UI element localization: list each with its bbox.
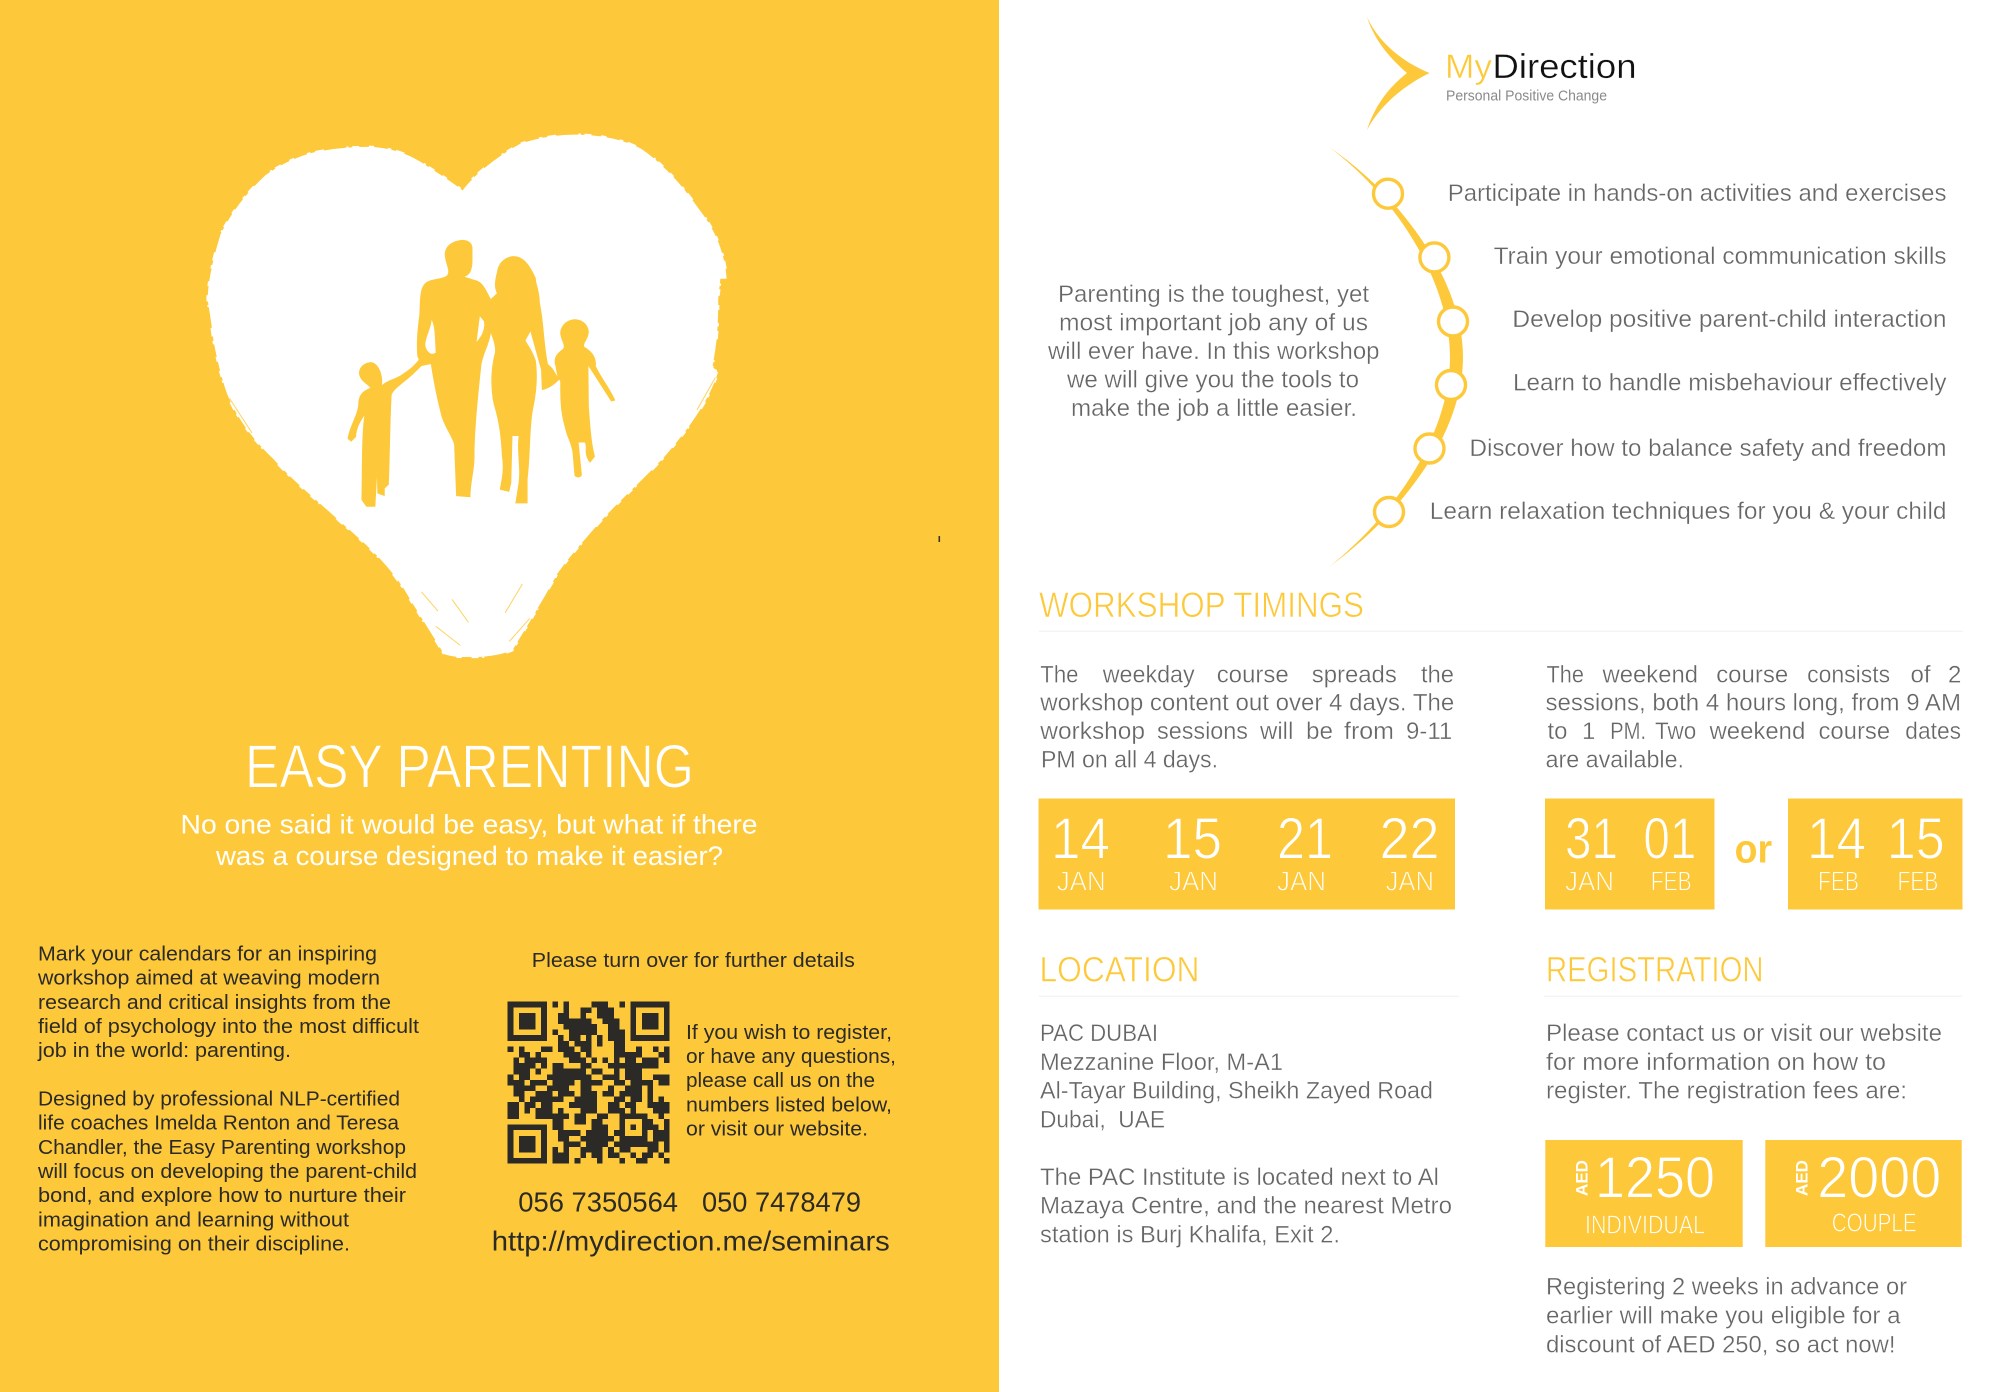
text: weekend course: The <box>1546 661 1584 688</box>
text block: workshop description: job in the world: parenting. <box>37 1040 291 1062</box>
text: early registration discount <box>1546 1273 1907 1358</box>
text block: workshop description: field of psychology into the most difficult <box>38 1016 419 1038</box>
text: location details <box>1040 1020 1452 1248</box>
text block: workshop description: bond, and explore how to nurture their <box>38 1185 406 1207</box>
fee box: couple: 2000 <box>1817 1146 1941 1211</box>
text: weekend course: weekend <box>1602 661 1698 688</box>
text: early registration discount: earlier will make you eligible for a <box>1546 1302 1901 1329</box>
icon: brush heart with family silhouette <box>206 133 728 658</box>
logo: MyDirection <box>1367 17 1636 130</box>
text: weekend course: Two <box>1655 718 1696 745</box>
list: workshop benefits: Learn relaxation techniques for you & your child <box>1430 498 1946 525</box>
date box: weekday dates: JAN <box>1386 866 1434 897</box>
fee box: couple <box>1765 1140 1962 1247</box>
text: weekday course: PM on all 4 days. <box>1041 746 1218 773</box>
text block: workshop description <box>37 944 419 1256</box>
text: location details: Al-Tayar Building, Sheikh Zayed Road <box>1040 1078 1433 1105</box>
text block: workshop description: Chandler, the Easy Parenting workshop <box>38 1137 406 1159</box>
text: weekday course: be <box>1306 718 1333 745</box>
heading: registration: REGISTRATION <box>1546 951 1764 990</box>
text: phone numbers: 056 7350564 <box>518 1186 678 1218</box>
subtitle: No one said it would be easy, but what if there <box>180 810 758 840</box>
text: weekend course: sessions, both 4 hours long, from 9 AM <box>1546 690 1961 717</box>
text: weekend course: are available. <box>1546 746 1684 773</box>
list: workshop benefits <box>1430 180 1947 525</box>
date box: weekday dates: JAN <box>1057 866 1106 897</box>
text: weekday course: The <box>1040 661 1078 688</box>
date box: weekend option one: JAN <box>1565 866 1614 897</box>
text block: workshop description: compromising on their discipline. <box>38 1234 350 1256</box>
text: contact note: please call us on the <box>686 1070 875 1092</box>
text: contact note: numbers listed below, <box>686 1094 892 1116</box>
text: location details: The PAC Institute is located next to Al <box>1040 1164 1439 1191</box>
text: weekend course: course <box>1716 661 1788 688</box>
list: workshop benefits: Develop positive parent-child interaction <box>1512 306 1946 333</box>
text: weekday course: workshop <box>1039 718 1145 745</box>
date box: weekday dates <box>1038 798 1455 910</box>
logo: MyDirection: My <box>1445 48 1492 86</box>
text: weekend course: PM. <box>1610 718 1646 745</box>
text: weekend course: to <box>1548 718 1568 745</box>
date box: weekend option two <box>1788 798 1962 910</box>
text block: workshop description: life coaches Imelda Renton and Teresa <box>38 1113 400 1135</box>
text: location details: PAC DUBAI <box>1040 1020 1158 1047</box>
text: intro paragraph: will ever have. In this workshop <box>1047 338 1380 365</box>
arc timeline with circles <box>1329 147 1468 567</box>
text: weekday course: will <box>1259 718 1293 745</box>
list: workshop benefits: Learn to handle misbehaviour effectively <box>1513 370 1947 396</box>
date box: weekend option one: 31 <box>1565 806 1618 871</box>
text: location details: Dubai, UAE <box>1040 1106 1165 1133</box>
text: early registration discount: Registering 2 weeks in advance or <box>1546 1273 1907 1300</box>
text: phone numbers <box>518 1186 861 1218</box>
subtitle <box>180 810 758 871</box>
text: registration intro: for more information on how to <box>1546 1049 1886 1076</box>
panel: yellow left page <box>0 0 999 1392</box>
text: location details: station is Burj Khalifa, Exit 2. <box>1040 1221 1340 1248</box>
fee box: individual <box>1545 1140 1743 1247</box>
text: registration intro <box>1546 1020 1942 1105</box>
text: phone numbers: 050 7478479 <box>702 1186 861 1218</box>
title: EASY PARENTING <box>245 732 694 800</box>
list: workshop benefits: Train your emotional communication skills <box>1494 243 1946 270</box>
text: weekday course: spreads <box>1312 661 1397 688</box>
text: weekend course: 1 <box>1582 718 1595 745</box>
text: weekday course: from <box>1344 718 1394 745</box>
text: weekend course: dates <box>1905 718 1961 745</box>
text: weekend course: weekend <box>1709 718 1805 745</box>
date box: weekend option two: FEB <box>1898 866 1938 897</box>
fee box: individual: AED <box>1572 1160 1591 1196</box>
text: weekend course: 2 <box>1948 661 1961 688</box>
text: contact note: or have any questions, <box>686 1046 896 1068</box>
logo: MyDirection: Direction <box>1492 48 1636 86</box>
date box: weekend option two: 14 <box>1807 806 1866 871</box>
text block: workshop description: imagination and learning without <box>38 1209 349 1231</box>
boy silhouette <box>348 353 432 507</box>
date box: weekday dates: JAN <box>1169 866 1218 897</box>
date box: weekday dates: 22 <box>1380 806 1440 871</box>
text: weekend course: consists <box>1807 661 1890 688</box>
subtitle: was a course designed to make it easier? <box>215 841 723 871</box>
text: intro paragraph: most important job any of us <box>1059 310 1368 336</box>
woman silhouette <box>488 256 559 503</box>
fee box: couple: AED <box>1792 1160 1811 1196</box>
list: workshop benefits: Discover how to balance safety and freedom <box>1470 435 1946 462</box>
text: early registration discount: discount of AED 250, so act now! <box>1546 1331 1896 1358</box>
icon: QR code <box>508 1002 670 1164</box>
list: workshop benefits: Participate in hands-on activities and exercises <box>1448 180 1946 207</box>
text: location details: Mezzanine Floor, M-A1 <box>1040 1049 1283 1076</box>
text: weekday course: weekday <box>1102 661 1195 688</box>
text: registration intro: register. The registration fees are: <box>1546 1078 1907 1105</box>
text block: workshop description: Designed by professional NLP-certified <box>38 1088 400 1110</box>
date box: weekend option one: 01 <box>1643 806 1696 871</box>
text: weekend course: course <box>1818 718 1890 745</box>
text: weekend course: of <box>1910 661 1931 688</box>
logo: MyDirection: Personal Positive Change <box>1446 89 1607 105</box>
heading: location: LOCATION <box>1040 951 1200 990</box>
date box: weekday dates: JAN <box>1277 866 1326 897</box>
text: weekday course: workshop content out over 4 days. The <box>1039 690 1454 717</box>
date box: weekday dates: 15 <box>1163 806 1222 871</box>
text: intro paragraph: we will give you the tools to <box>1066 367 1359 394</box>
text: contact note <box>686 1022 896 1140</box>
text: registration intro: Please contact us or visit our website <box>1546 1020 1942 1047</box>
text: weekday course: course <box>1217 661 1289 688</box>
text: intro paragraph: Parenting is the toughest, yet <box>1058 281 1369 308</box>
fee box: couple: COUPLE <box>1832 1208 1917 1238</box>
text: weekday course: the <box>1421 661 1454 688</box>
fee box: individual: INDIVIDUAL <box>1585 1209 1705 1239</box>
date box: weekday dates: 14 <box>1051 806 1110 871</box>
text: location details: Mazaya Centre, and the nearest Metro <box>1040 1193 1452 1220</box>
text: weekend course <box>1546 661 1961 773</box>
text: weekday course <box>1039 661 1454 773</box>
text: intro paragraph: make the job a little easier. <box>1071 395 1357 422</box>
text: or: or <box>1735 828 1772 872</box>
date box: weekday dates: 21 <box>1277 806 1333 871</box>
fee box: individual: 1250 <box>1595 1146 1715 1211</box>
date box: weekend option one: FEB <box>1651 866 1692 897</box>
text block: workshop description: Mark your calendars for an inspiring <box>38 944 377 966</box>
heading: workshop timings: WORKSHOP TIMINGS <box>1039 586 1364 625</box>
text: intro paragraph <box>1047 281 1380 422</box>
date box: weekend option two: 15 <box>1887 806 1945 871</box>
text: website: http://mydirection.me/seminars <box>492 1226 890 1257</box>
text: turn over note: Please turn over for further details <box>532 950 855 972</box>
man silhouette <box>417 240 491 497</box>
text: contact note: or visit our website. <box>686 1118 868 1140</box>
girl silhouette <box>555 319 615 477</box>
text block: workshop description: will focus on developing the parent-child <box>37 1161 417 1183</box>
date box: weekend option two: FEB <box>1818 866 1859 897</box>
text block: workshop description: workshop aimed at weaving modern <box>37 968 380 990</box>
text: weekday course: 9-11 <box>1406 718 1452 745</box>
text: weekday course: sessions <box>1157 718 1248 745</box>
text: contact note: If you wish to register, <box>686 1022 892 1044</box>
text block: workshop description: research and critical insights from the <box>38 992 391 1014</box>
date box: weekend option one <box>1545 798 1714 910</box>
